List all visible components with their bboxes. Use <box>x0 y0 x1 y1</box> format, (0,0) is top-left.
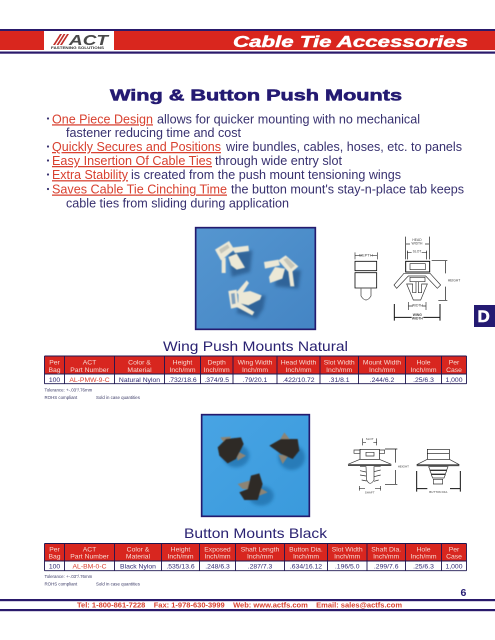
bullet: one piece design: fastener reducing time and cost <box>66 126 241 140</box>
table header row: Hole <box>417 546 431 554</box>
logo: ACT Fastening Solutions <box>44 31 114 51</box>
table data row: 100 <box>49 377 60 384</box>
main heading: Wing & Button Push Mounts <box>110 88 402 104</box>
table header row: Per <box>49 546 61 554</box>
table data row: 1,000 <box>445 377 463 384</box>
table header row: Part Number <box>70 367 109 374</box>
table data row <box>49 564 463 570</box>
table data row: .196/5.0 <box>335 564 360 570</box>
section tab D <box>474 305 495 327</box>
bullet: easy insertion <box>47 154 342 168</box>
table header row: ACT <box>83 546 96 554</box>
diagram: button mount dimensions <box>348 437 460 494</box>
table header row: Material <box>126 554 151 561</box>
table header row: Exposed <box>204 546 231 554</box>
table header row: Inch/mm <box>373 554 400 561</box>
table header row: Color & <box>128 360 151 367</box>
table data row: .79/20.1 <box>243 377 267 384</box>
table data row: .535/13.6 <box>166 564 195 570</box>
table header row: Per <box>49 360 61 367</box>
table header row: Per <box>449 546 460 554</box>
table data row: 1,000 <box>445 564 463 570</box>
table data row: Black Nylon <box>120 564 156 570</box>
bullet: extra stability: is created from the push mount tensioning wings <box>131 168 401 182</box>
table header row: Inch/mm <box>242 367 268 374</box>
bullet: quickly secures: Quickly Secures and Positions <box>52 140 221 154</box>
table header row: Inch/mm <box>293 554 319 561</box>
footer band: Tel: 1-800-861-7228 Fax: 1-978-630-3999 Web: www.actfs.com Email: sales@actfs.com <box>77 603 402 610</box>
photo: black button mounts <box>202 415 309 516</box>
table data row: 100 <box>49 564 60 570</box>
table notes: wing <box>44 388 141 400</box>
table header row: Case <box>446 367 462 374</box>
table data row: .422/10.72 <box>282 377 315 384</box>
front view: HEIGHT <box>448 278 460 282</box>
table data row: .732/18.6 <box>168 377 197 384</box>
front view: SLOT <box>413 249 421 253</box>
table header row: Wing Width <box>238 360 273 367</box>
feature bullet list <box>47 112 464 210</box>
clip three <box>228 280 262 315</box>
table header row: Inch/mm <box>410 367 437 374</box>
table header row: Inch/mm <box>334 554 361 561</box>
table header row: Height <box>171 546 190 554</box>
table data row: .374/9.5 <box>204 377 229 384</box>
table header row: Depth <box>208 360 226 367</box>
front view: SLOT <box>366 437 374 441</box>
side view: DEPTH <box>359 253 373 258</box>
front view <box>394 237 460 321</box>
bullet: easy insertion: Easy Insertion Of Cable Ties <box>52 154 212 168</box>
clip three <box>238 473 268 500</box>
table header row: Material <box>127 367 152 374</box>
table data row <box>49 377 463 384</box>
front view: SHAFT <box>365 490 375 494</box>
section tab D: D <box>478 307 490 326</box>
header title: Cable Tie Accessories <box>233 34 469 51</box>
bullet: one piece design: allows for quicker mounting with no mechanical <box>157 112 420 126</box>
table data row: .248/6.3 <box>205 564 230 570</box>
table notes: wing: Sold in case quantities <box>96 395 141 400</box>
bullet: saves cinching time <box>47 182 464 210</box>
table: wing push mounts <box>44 356 466 384</box>
table header row: Inch/mm <box>204 367 230 374</box>
table header row: Slot Width <box>332 546 363 554</box>
table header row: Case <box>446 554 462 561</box>
bullet: one piece design <box>47 112 420 140</box>
section title: button: Button Mounts Black <box>184 525 328 541</box>
clip two <box>264 255 298 286</box>
table header row: Inch/mm <box>410 554 437 561</box>
table header row: Inch/mm <box>326 367 353 374</box>
table header row <box>48 546 462 561</box>
clip one <box>218 437 246 463</box>
photo: natural wing push mounts <box>196 228 315 329</box>
page number: 6 <box>460 587 466 599</box>
bullet: extra stability: Extra Stability <box>52 168 129 182</box>
table header row: Inch/mm <box>204 554 231 561</box>
table header row: Height <box>173 360 192 367</box>
front view: HEIGHT <box>398 465 409 469</box>
table header row: Shaft Dia. <box>371 546 401 554</box>
table data row: .634/16.12 <box>290 564 322 570</box>
table notes: button: Sold in case quantities <box>96 582 141 586</box>
table header row: Mount Width <box>363 360 401 367</box>
table notes: wing: ROHS compliant <box>44 395 78 400</box>
table header row: ACT <box>83 360 96 367</box>
table header row: Inch/mm <box>167 554 194 561</box>
table data row: .244/6.2 <box>370 377 394 384</box>
header band <box>0 29 495 54</box>
table notes: button: ROHS compliant <box>44 582 78 586</box>
table notes: wing: Tolerance: +-.03"/.76mm <box>44 388 93 392</box>
table header row: Head Width <box>281 360 316 367</box>
table header row: Slot Width <box>324 360 355 367</box>
table header row: Shaft Length <box>241 546 279 554</box>
front view: WIDTH <box>412 303 423 307</box>
table data row: AL-PMW-9-C <box>69 377 110 384</box>
table data row: .25/6.3 <box>413 564 434 570</box>
section title: wing: Wing Push Mounts Natural <box>163 338 348 354</box>
side view: BUTTON DIA. <box>429 490 448 494</box>
bullet: saves cinching time: cable ties from sliding during application <box>66 196 289 210</box>
bullet: quickly secures: wire bundles, cables, hoses, etc. to panels <box>225 140 462 154</box>
diagram: wing mount dimensions <box>355 237 460 321</box>
table data row: .31/8.1 <box>329 377 350 384</box>
bullet: easy insertion: through wide entry slot <box>215 154 342 168</box>
front view: HEAD <box>412 238 422 242</box>
bullet: saves cinching time: Saves Cable Tie Cinching Time <box>52 182 227 196</box>
table header row: Part Number <box>70 554 109 561</box>
table header row: Inch/mm <box>285 367 312 374</box>
table header row <box>48 360 462 374</box>
bullet: one piece design: One Piece Design <box>52 112 153 126</box>
logo: ACT Fastening Solutions: FASTENING SOLUTIONS <box>51 46 104 50</box>
bullet: quickly secures <box>47 140 462 154</box>
table header row: Bag <box>48 367 61 374</box>
table header row: Bag <box>48 554 61 561</box>
table data row: .299/7.6 <box>374 564 399 570</box>
table data row: .25/6.3 <box>413 377 434 384</box>
table header row: Hole <box>417 360 431 367</box>
table: button mounts <box>44 544 466 571</box>
table header row: Per <box>449 360 460 367</box>
front view: WIDTH <box>412 316 423 320</box>
front view: WIDTH <box>412 242 423 246</box>
clip one <box>215 241 249 273</box>
front view: WING <box>413 313 422 317</box>
logo: ACT Fastening Solutions: ACT <box>68 32 110 49</box>
table header row: Color & <box>127 546 150 554</box>
table header row: Button Dia. <box>289 546 323 554</box>
table data row: .287/7.3 <box>248 564 272 570</box>
table data row: Natural Nylon <box>119 377 160 384</box>
table notes: button <box>44 574 141 586</box>
clip two <box>269 432 299 464</box>
table header row: Inch/mm <box>169 367 196 374</box>
table data row: AL-BM-0-C <box>72 564 107 570</box>
front view <box>348 437 409 494</box>
table notes: button: Tolerance: +-.03"/.76mm <box>44 574 93 579</box>
bullet: saves cinching time: the button mount's stay-n-place tab keeps <box>231 182 464 196</box>
table header row: Inch/mm <box>247 554 273 561</box>
table header row: Inch/mm <box>369 367 395 374</box>
